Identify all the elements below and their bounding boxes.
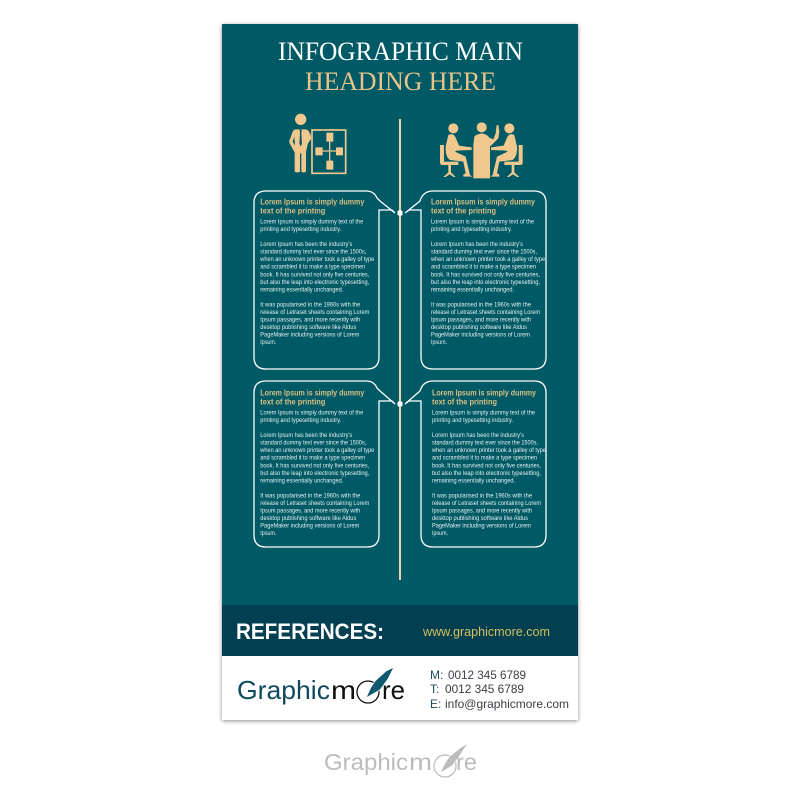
- panel: top-left speech bubble: release of Letraset sheets containing Lorem: [260, 309, 369, 316]
- panel: bottom-right speech bubble: It was popularised in the 1960s with the: [432, 492, 532, 499]
- title: [278, 37, 523, 96]
- panel: bottom-right speech bubble: book. It has survived not only five centuries,: [432, 462, 541, 469]
- panel: top-right speech bubble: PageMaker including versions of Lorem: [431, 332, 530, 339]
- panel: top-left speech bubble: when an unknown printer took a galley of type: [259, 256, 375, 263]
- panel: bottom-left speech bubble: text of the printing: [260, 398, 325, 407]
- title: INFOGRAPHIC MAIN: [278, 37, 523, 66]
- panel: top-left speech bubble: but also the leap into electronic typesetting,: [260, 279, 369, 286]
- panel: bottom-right speech bubble: printing and typesetting industry.: [432, 417, 513, 424]
- panel: bottom-left speech bubble: and scrambled it to make a type specimen: [260, 455, 366, 462]
- website link: www.graphicmore.com: [422, 624, 550, 639]
- panel: bottom-left speech bubble: It was popularised in the 1960s with the: [260, 492, 361, 499]
- panel: bottom-right speech bubble: but also the leap into electronic typesetting,: [432, 470, 541, 477]
- panel: top-right speech bubble: but also the leap into electronic typesetting,: [431, 279, 540, 286]
- panel: bottom-left speech bubble: Ipsum.: [260, 530, 276, 537]
- panel: bottom-left speech bubble: Lorem Ipsum is simply dummy text of the: [260, 410, 364, 416]
- panel: top-left speech bubble: standard dummy text ever since the 1500s,: [260, 249, 366, 256]
- panel: top-right speech bubble: printing and typesetting industry.: [431, 226, 512, 233]
- poster panel background: [222, 24, 578, 720]
- panel: bottom-left speech bubble: but also the leap into electronic typesetting,: [260, 470, 369, 477]
- panel: top-right speech bubble: text of the printing: [431, 207, 496, 216]
- panel: top-left speech bubble: Lorem Ipsum has been the industry's: [260, 241, 353, 248]
- panel: bottom-right speech bubble: [405, 381, 546, 547]
- panel: bottom-left speech bubble: Ipsum passages, and more recently with: [260, 508, 361, 514]
- panel: top-left speech bubble: and scrambled it to make a type specimen: [260, 264, 366, 271]
- panel: top-right speech bubble: Ipsum.: [431, 339, 447, 346]
- panel: top-left speech bubble: Ipsum passages, and more recently with: [260, 316, 361, 324]
- panel: top-left speech bubble: [254, 191, 395, 369]
- panel: bottom-right speech bubble: and scrambled it to make a type specimen: [432, 455, 537, 462]
- panel: top-right speech bubble: Ipsum passages, and more recently with: [431, 316, 531, 324]
- panel: bottom-right speech bubble: Lorem Ipsum is simply dummy text of the: [432, 410, 535, 416]
- centre standing person and table: [473, 125, 499, 178]
- panel: top-left speech bubble: Lorem Ipsum is simply dummy text of the: [260, 218, 364, 226]
- panel: bottom-right speech bubble: remaining essentially unchanged.: [432, 477, 515, 484]
- panel: top-left speech bubble: It was popularised in the 1960s with the: [260, 301, 361, 308]
- panel: top-right speech bubble: remaining essentially unchanged.: [431, 286, 514, 293]
- logo: Graphicmore: m: [331, 675, 356, 705]
- watermark logo: Graphic: [324, 749, 408, 775]
- panel: top-right speech bubble: book. It has survived not only five centuries,: [431, 271, 540, 278]
- icon: pen nib: [366, 667, 394, 698]
- panel: bottom-left speech bubble: PageMaker including versions of Lorem: [260, 523, 359, 530]
- panel: bottom-right speech bubble: when an unknown printer took a galley of type: [431, 447, 546, 454]
- panel: top-right speech bubble: when an unknown printer took a galley of type: [430, 256, 545, 263]
- panel: bottom-left speech bubble: when an unknown printer took a galley of type: [259, 447, 375, 454]
- title: HEADING HERE: [305, 67, 496, 96]
- panel: top-left speech bubble: text of the printing: [260, 207, 325, 216]
- panel: bottom-left speech bubble: Lorem Ipsum is simply dummy: [260, 388, 365, 398]
- contact details: E:: [430, 697, 441, 711]
- contact details: info@graphicmore.com: [445, 697, 569, 711]
- timeline connector dots: [398, 210, 402, 406]
- white contact footer: [222, 656, 578, 720]
- panel: top-right speech bubble: Lorem Ipsum has been the industry's: [431, 241, 524, 248]
- references band: [222, 605, 578, 656]
- panel: top-left speech bubble: book. It has survived not only five centuries,: [260, 271, 369, 278]
- panel: bottom-left speech bubble: standard dummy text ever since the 1500s,: [260, 440, 366, 447]
- watermark logo: [324, 743, 477, 777]
- panel: top-right speech bubble: release of Letraset sheets containing Lorem: [431, 309, 540, 316]
- icon: three people meeting at a table: [440, 122, 523, 178]
- panel: bottom-left speech bubble: remaining essentially unchanged.: [260, 477, 343, 484]
- contact details: T:: [430, 682, 439, 696]
- logo: Graphicmore: [237, 667, 405, 705]
- contact details: 0012 345 6789: [445, 682, 524, 696]
- panel: bottom-right speech bubble: Lorem Ipsum is simply dummy: [432, 388, 536, 398]
- watermark logo: m: [409, 749, 432, 775]
- icon: presenter with flowchart board: [289, 114, 346, 173]
- references heading: REFERENCES:: [236, 619, 384, 644]
- logo: Graphicmore: re: [382, 675, 405, 705]
- panel: top-left speech bubble: printing and typesetting industry.: [260, 226, 341, 233]
- panel: top-left speech bubble: Ipsum.: [260, 339, 276, 346]
- panel: bottom-left speech bubble: Lorem Ipsum has been the industry's: [260, 432, 353, 439]
- panel: bottom-right speech bubble: Ipsum.: [432, 530, 448, 537]
- panel: bottom-left speech bubble: printing and typesetting industry.: [260, 417, 341, 424]
- panel: bottom-left speech bubble: desktop publishing software like Aldus: [260, 515, 357, 522]
- panel: top-left speech bubble: remaining essentially unchanged.: [260, 286, 343, 293]
- watermark logo: re: [456, 749, 477, 775]
- panel: bottom-left speech bubble: [254, 381, 395, 547]
- panel: top-left speech bubble: PageMaker including versions of Lorem: [260, 332, 359, 339]
- panel: top-right speech bubble: Lorem Ipsum is simply dummy text of the: [431, 218, 534, 226]
- contact details: 0012 345 6789: [448, 668, 526, 682]
- panel: bottom-right speech bubble: Lorem Ipsum has been the industry's: [432, 432, 525, 439]
- panel: top-right speech bubble: [405, 191, 546, 369]
- panel: top-right speech bubble: standard dummy text ever since the 1500s,: [431, 249, 537, 256]
- left seated person: [440, 123, 472, 177]
- panel: top-right speech bubble: desktop publishing software like Aldus: [431, 324, 528, 331]
- panel: top-left speech bubble: Lorem Ipsum is simply dummy: [260, 198, 365, 206]
- panel: top-left speech bubble: desktop publishing software like Aldus: [260, 324, 357, 331]
- panel: bottom-right speech bubble: Ipsum passages, and more recently with: [432, 508, 532, 514]
- icon: watermark pen nib: [440, 743, 468, 773]
- contact details: [430, 668, 569, 711]
- panel: bottom-right speech bubble: PageMaker including versions of Lorem: [432, 523, 531, 530]
- logo: Graphicmore: Graphic: [237, 675, 330, 705]
- panel: bottom-left speech bubble: release of Letraset sheets containing Lorem: [260, 500, 369, 507]
- central vertical timeline line: [399, 119, 401, 580]
- right seated person: [490, 123, 523, 177]
- panel: top-right speech bubble: and scrambled it to make a type specimen: [431, 264, 536, 271]
- contact details: M:: [430, 668, 443, 682]
- panel: top-right speech bubble: Lorem Ipsum is simply dummy: [431, 198, 535, 206]
- panel: bottom-right speech bubble: release of Letraset sheets containing Lorem: [432, 500, 541, 507]
- panel: bottom-left speech bubble: book. It has survived not only five centuries,: [260, 462, 369, 469]
- panel: bottom-right speech bubble: text of the printing: [432, 398, 497, 407]
- panel: bottom-right speech bubble: desktop publishing software like Aldus: [432, 515, 529, 522]
- panel: bottom-right speech bubble: standard dummy text ever since the 1500s,: [432, 440, 538, 447]
- panel: top-right speech bubble: It was popularised in the 1960s with the: [431, 301, 531, 308]
